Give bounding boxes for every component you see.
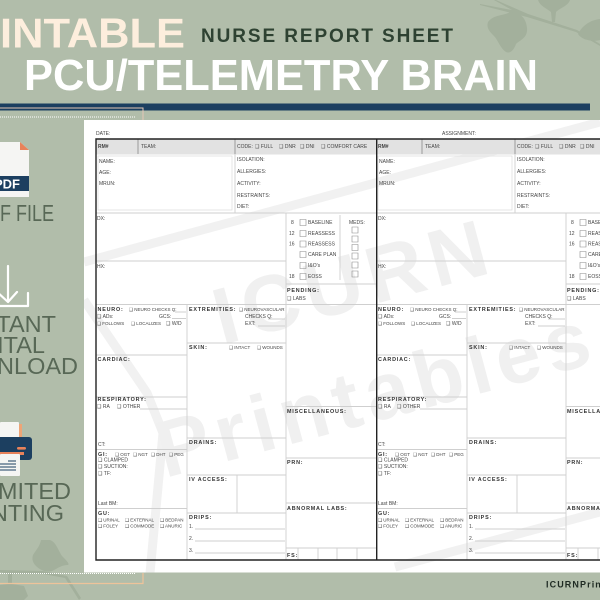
checklist: I&O's <box>588 263 600 269</box>
extremities: CHECKS Q: <box>245 314 273 320</box>
drips <box>189 515 285 554</box>
header row: TEAM: <box>141 144 156 150</box>
gu: GU: <box>98 511 110 517</box>
gi: Last BM: <box>98 501 118 507</box>
patient info: DIET: <box>237 204 249 210</box>
checklist: 16 <box>289 242 295 248</box>
watermark: Printables <box>146 293 599 494</box>
respiratory: ❑ RA <box>378 404 391 410</box>
patient info: NAME: <box>99 159 115 165</box>
gu: ❑ BEDPAN <box>160 518 183 522</box>
neuro: ❑ ADs: <box>97 314 113 320</box>
watermark <box>84 120 600 572</box>
gi: ❑ NGT <box>133 452 148 457</box>
neuro: ❑ FOLLOWS <box>97 321 124 326</box>
pending: PENDING: <box>287 288 320 294</box>
patient info: DX: <box>97 216 105 222</box>
gi: ❑ SUCTION: <box>98 464 128 470</box>
date label: DATE: <box>96 131 110 137</box>
leaves: bottom left <box>0 540 81 600</box>
prn, labs, fs: FS: <box>567 553 578 559</box>
patient info: AGE: <box>99 170 111 176</box>
checklist: 8 <box>571 220 574 226</box>
patient info: DIET: <box>517 204 529 210</box>
patient info: ALLERGIES: <box>517 169 546 175</box>
drips: 1. <box>469 524 473 530</box>
gi: ❑ NGT <box>413 452 428 457</box>
header row: ❑ DNR <box>559 144 576 150</box>
drains and iv access: DRAINS: <box>189 440 217 446</box>
extremities: ❑ NEUROVASCULAR <box>519 307 565 312</box>
pending: ❑ LABS <box>287 296 306 302</box>
patient info: ISOLATION: <box>237 157 265 163</box>
leaves: top right <box>480 0 600 53</box>
skin: ❑ WOUNDS <box>257 345 283 350</box>
checklist: I&O's <box>308 263 321 269</box>
drips: 1. <box>189 524 193 530</box>
gi: ❑ TF: <box>98 471 111 477</box>
prn, labs, fs: PRN: <box>567 460 583 466</box>
header row: ❑ COMFORT CARE <box>321 144 368 150</box>
gu: ❑ COMMODE <box>125 524 154 528</box>
pending: PENDING: <box>567 288 600 294</box>
gi: GI: <box>378 452 388 458</box>
patient info: ACTIVITY: <box>517 181 541 187</box>
gu: ❑ BEDPAN <box>440 518 463 522</box>
gi: ❑ PEG <box>449 452 464 457</box>
gu: ❑ FOLEY <box>378 524 398 528</box>
gu: ❑ COMMODE <box>405 524 434 528</box>
checklist: 12 <box>289 231 295 237</box>
patient info: MRUN: <box>99 181 115 187</box>
label: unlimited printing: MITED <box>0 478 71 504</box>
drips: 3. <box>189 548 193 554</box>
respiratory: RESPIRATORY: <box>378 397 427 403</box>
patient info: RESTRAINTS: <box>517 193 550 199</box>
checklist: 16 <box>569 242 575 248</box>
neuro: ❑ LOCALIZES <box>411 321 441 326</box>
subtitle: nurse report sheet: NURSE REPORT SHEET <box>201 26 453 47</box>
patient info: NAME: <box>379 159 395 165</box>
extremities: EXTREMITIES: <box>469 307 516 313</box>
neuro: ❑ NEURO CHECKS Q: <box>410 307 458 312</box>
checklist: EOSS <box>308 274 323 280</box>
gi: ❑ OGT <box>395 452 410 457</box>
left frame decoration <box>0 108 143 120</box>
skin: ❑ INTACT <box>229 345 250 350</box>
prn, labs, fs: ABNORMAL LABS: <box>287 506 348 512</box>
respiratory: RESPIRATORY: <box>98 397 147 403</box>
label: pdf file: F FILE <box>0 200 54 226</box>
cardiac: CARDIAC: <box>98 357 131 363</box>
neuro: NEURO: <box>98 307 124 313</box>
drips: 3. <box>469 548 473 554</box>
title: pcu telemetry brain: PCU/TELEMETRY BRAIN <box>24 51 538 100</box>
checklist: 18 <box>569 274 575 280</box>
white sheet <box>84 120 600 572</box>
gi: ❑ DHT <box>431 452 446 457</box>
skin: ❑ WOUNDS <box>537 345 563 350</box>
patient info: ISOLATION: <box>517 157 545 163</box>
neuro: ❑ LOCALIZES <box>131 321 161 326</box>
checklist: MEDS: <box>349 220 365 226</box>
gu: GU: <box>378 511 390 517</box>
header row: ❑ FULL <box>535 144 553 150</box>
drips <box>469 515 565 554</box>
respiratory: ❑ OTHER <box>397 404 421 410</box>
header row: ❑ DNI <box>300 144 314 150</box>
gi: ❑ TF: <box>378 471 391 477</box>
checklist <box>289 220 365 280</box>
assignment label: ASSIGNMENT: <box>442 131 476 137</box>
gi: GI: <box>98 452 108 458</box>
drips: DRIPS: <box>189 515 212 521</box>
neuro: ❑ W/D <box>166 321 182 327</box>
extremities: EXT: <box>245 321 256 327</box>
prn, labs, fs: FS: <box>287 553 298 559</box>
extremities: CHECKS Q: <box>525 314 553 320</box>
gu: ❑ ANURIC <box>440 524 463 528</box>
checklist: REASSESS <box>308 231 336 237</box>
prn, labs, fs: PRN: <box>287 460 303 466</box>
checklist: REASSESS <box>308 242 336 248</box>
gi: ❑ DHT <box>151 452 166 457</box>
drips: 2. <box>189 536 193 542</box>
neuro: ❑ FOLLOWS <box>378 321 405 326</box>
gi: ❑ SUCTION: <box>378 464 408 470</box>
icon: printer <box>0 422 32 476</box>
pending: ❑ LABS <box>567 296 586 302</box>
watermark: ICURN <box>203 203 497 361</box>
header row: CODE: <box>517 144 533 150</box>
patient info: HX: <box>378 264 386 270</box>
header row: RM# <box>378 144 389 150</box>
patient info: DX: <box>378 216 386 222</box>
respiratory: ❑ RA <box>97 404 110 410</box>
drains and iv access: DRAINS: <box>469 440 497 446</box>
gi: ❑ OGT <box>115 452 130 457</box>
drains and iv access: IV ACCESS: <box>469 477 508 483</box>
checklist: 18 <box>289 274 295 280</box>
skin: SKIN: <box>189 345 208 351</box>
patient info: RESTRAINTS: <box>237 193 270 199</box>
gu: ❑ EXTERNAL <box>405 518 435 522</box>
gu: ❑ URINAL <box>98 518 120 522</box>
respiratory: ❑ OTHER <box>117 404 141 410</box>
neuro: ❑ NEURO CHECKS Q: <box>129 307 177 312</box>
gu: ❑ URINAL <box>378 518 400 522</box>
patient info: HX: <box>97 264 105 270</box>
icon: pdf file <box>0 142 29 197</box>
patient info: ALLERGIES: <box>237 169 266 175</box>
table outer borders <box>96 139 600 560</box>
gu: ❑ ANURIC <box>160 524 183 528</box>
title: printable: INTABLE <box>0 10 185 56</box>
gi: ❑ CLAMPED <box>378 458 408 464</box>
neuro: NEURO: <box>378 307 404 313</box>
neuro: ❑ ADs: <box>378 314 394 320</box>
respiratory: CT: <box>98 442 106 448</box>
cardiac: CARDIAC: <box>378 357 411 363</box>
patient info: AGE: <box>379 170 391 176</box>
checklist: 8 <box>291 220 294 226</box>
extremities: EXTREMITIES: <box>189 307 236 313</box>
neuro: GCS: <box>159 314 171 320</box>
extremities: ❑ NEUROVASCULAR <box>239 307 285 312</box>
gi: Last BM: <box>378 501 398 507</box>
patient info: MRUN: <box>379 181 395 187</box>
header row: ❑ DNR <box>279 144 296 150</box>
gu: ❑ EXTERNAL <box>125 518 155 522</box>
drips: 2. <box>469 536 473 542</box>
skin: ❑ INTACT <box>509 345 530 350</box>
header row: TEAM: <box>425 144 440 150</box>
label: instant digital download <box>0 311 78 379</box>
gi: ❑ CLAMPED <box>98 458 128 464</box>
miscellaneous: MISCELLANEOUS: <box>287 409 347 415</box>
header row: ❑ DNI <box>580 144 594 150</box>
drips: DRIPS: <box>469 515 492 521</box>
gi: ❑ PEG <box>169 452 184 457</box>
checklist <box>569 220 600 280</box>
neuro: ❑ W/D <box>446 321 462 327</box>
bottom frame decoration <box>0 573 143 584</box>
gu: ❑ FOLEY <box>98 524 118 528</box>
navy divider bar <box>0 104 590 110</box>
patient info: ACTIVITY: <box>237 181 261 187</box>
checklist: BASELINE <box>308 220 333 226</box>
checklist: CARE PLAN <box>308 252 337 258</box>
checklist: 12 <box>569 231 575 237</box>
respiratory: CT: <box>378 442 386 448</box>
header row: RM# <box>98 144 109 150</box>
panel: left report <box>96 139 377 560</box>
label: unlimited printing <box>0 478 71 526</box>
extremities: EXT: <box>525 321 536 327</box>
header row: ❑ FULL <box>255 144 273 150</box>
panel: right report <box>377 139 600 560</box>
drains and iv access: IV ACCESS: <box>189 477 228 483</box>
header row: CODE: <box>237 144 253 150</box>
icon: download arrow <box>0 266 28 306</box>
neuro: GCS: <box>439 314 451 320</box>
skin: SKIN: <box>469 345 488 351</box>
